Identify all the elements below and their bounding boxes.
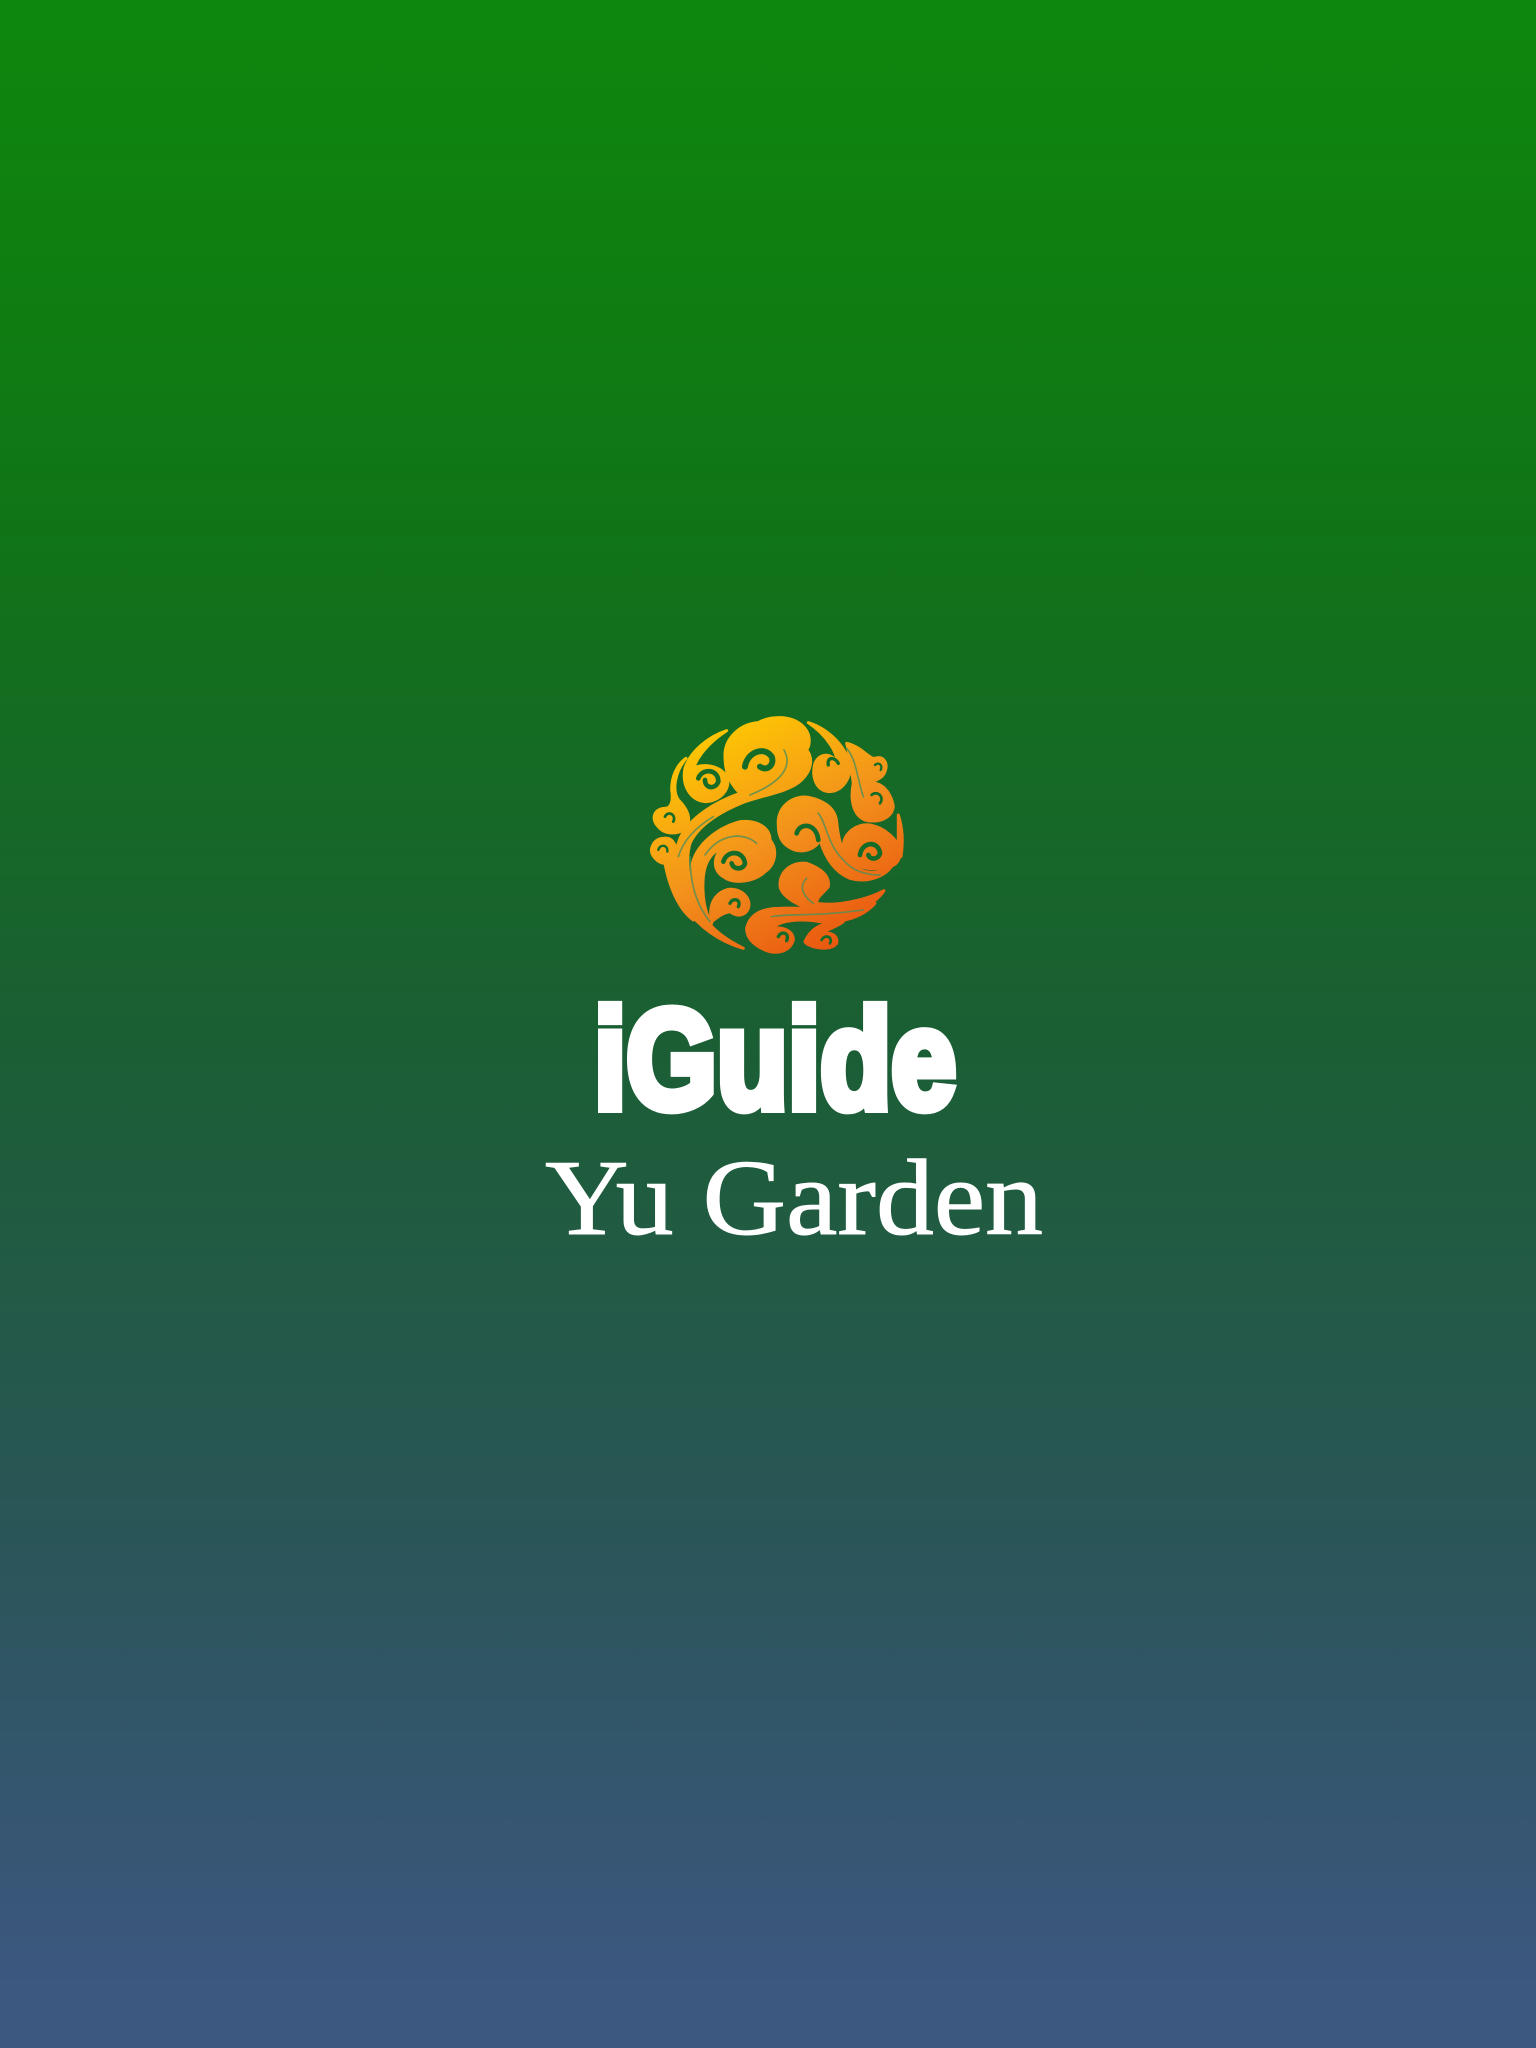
icon: golden cloud emblem xyxy=(651,718,902,952)
top cloud with long swoosh xyxy=(674,718,811,948)
centre right cloud with swoosh xyxy=(778,797,893,880)
bottom clouds with tails xyxy=(747,903,875,952)
subtitle: Yu Garden: Yu Garden xyxy=(545,1139,1043,1258)
upper left cloud xyxy=(684,731,728,802)
spiral details xyxy=(745,751,772,768)
middle left cloud xyxy=(691,821,775,923)
bottom centre cloud xyxy=(780,863,884,914)
right cloud xyxy=(843,825,901,869)
bottom left cloud xyxy=(711,889,749,922)
upper right cloud xyxy=(808,723,850,792)
title: iGuide: iGuide xyxy=(594,980,956,1138)
left small clouds xyxy=(654,758,689,833)
fine green veins xyxy=(678,748,880,922)
